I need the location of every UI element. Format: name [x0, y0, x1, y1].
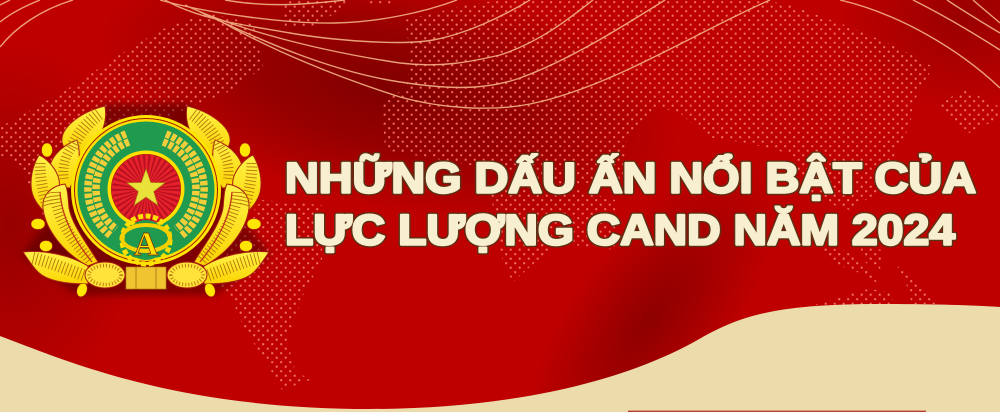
decorative gold curves [0, 0, 1000, 108]
emblem ribbon block [126, 267, 166, 289]
next section bar edge [628, 411, 926, 412]
emblem right leaves [167, 106, 269, 298]
emblem buds [31, 143, 89, 298]
title line 1 fill: NHỮNG DẤU ẤN NỔI BẬT CỦA [285, 152, 976, 202]
emblem red sun [108, 150, 184, 228]
emblem shadow [22, 104, 270, 295]
emblem star [127, 169, 165, 205]
emblem rings [71, 115, 221, 265]
title [285, 152, 976, 254]
cream wave [0, 304, 1000, 412]
emblem side knot [85, 262, 125, 288]
emblem left leaves [23, 106, 125, 298]
title line 2 fill: LỰC LƯỢNG CAND NĂM 2024 [285, 206, 955, 254]
police emblem [23, 106, 269, 298]
emblem wheat sprays [88, 134, 204, 236]
title line 2: LỰC LƯỢNG CAND NĂM 2024 [285, 206, 955, 254]
title line 1: NHỮNG DẤU ẤN NỔI BẬT CỦA [285, 152, 976, 202]
leaf hatching [33, 114, 99, 276]
emblem gear and monogram: A [134, 226, 159, 263]
emblem gear and monogram [122, 216, 170, 264]
